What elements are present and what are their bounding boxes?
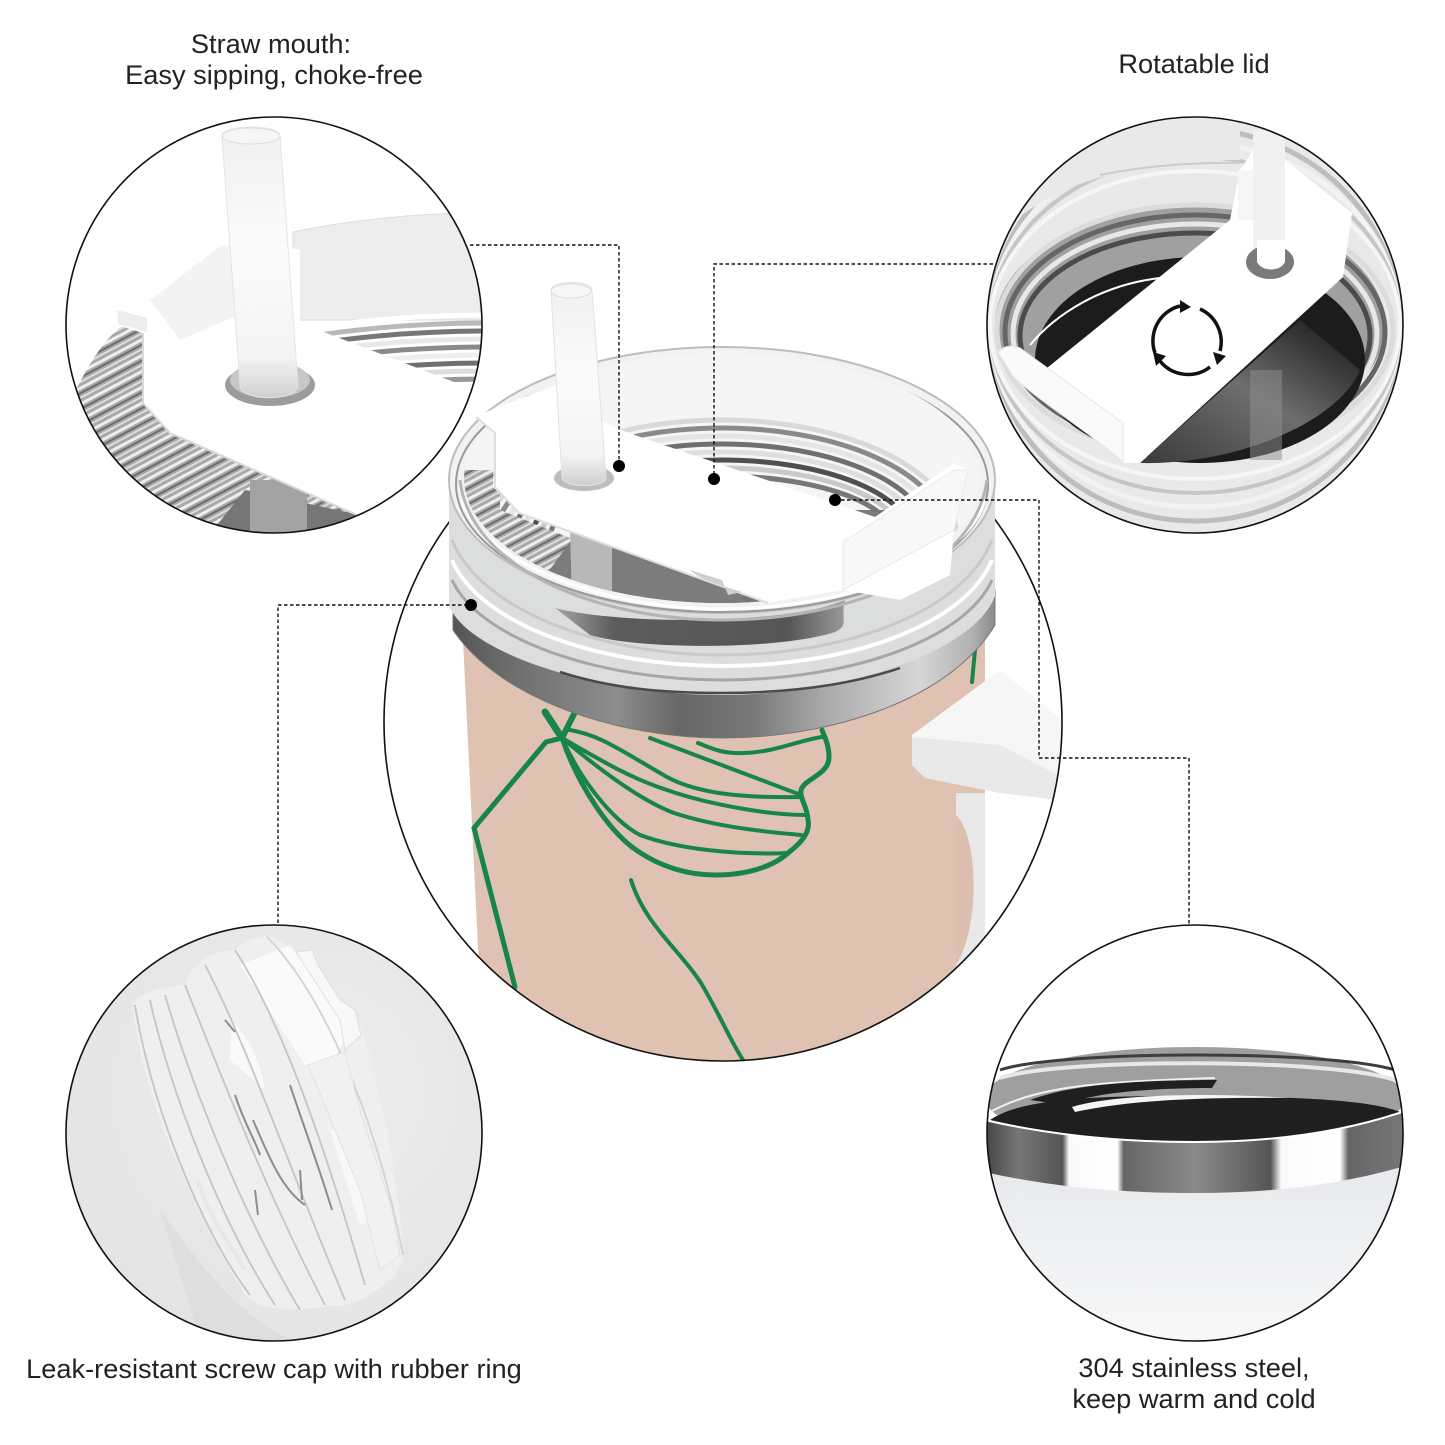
callout text: straw mouth: Straw mouth: <box>191 28 351 59</box>
lid front streaks <box>76 326 350 524</box>
lid skirt <box>449 480 995 695</box>
tumbler body <box>460 640 996 1070</box>
thread lines <box>135 937 403 1310</box>
white body <box>992 1168 1399 1334</box>
straw <box>551 282 614 491</box>
steel rim <box>989 1047 1401 1116</box>
dashed connector: straw mouth <box>470 245 619 465</box>
thread grooves <box>323 312 482 382</box>
clear lid <box>449 347 995 695</box>
callout text: stainless steel: keep warm and cold <box>1072 1383 1316 1414</box>
white tab <box>122 248 454 515</box>
callout text: leak-resistant cap: Leak-resistant screw cap with rubber ring <box>26 1353 522 1384</box>
white tab <box>1048 151 1352 463</box>
straw below tab <box>570 532 612 591</box>
straw <box>1253 134 1285 250</box>
straw <box>222 127 298 398</box>
rim slits <box>1030 1080 1217 1105</box>
cap nubs <box>296 950 361 1050</box>
bottom right circle: stainless steel detail <box>985 925 1405 1345</box>
front rim highlight <box>462 500 985 609</box>
bottom left circle: screw cap detail <box>66 925 482 1341</box>
leaf line art <box>474 650 975 1060</box>
top left circle: straw mouth detail <box>66 117 490 540</box>
straw hole <box>225 372 315 406</box>
cap body <box>134 991 402 1309</box>
center panel: tumbler close-up <box>384 282 1062 1070</box>
interior dark <box>990 1096 1400 1142</box>
callout text: stainless steel: 304 stainless steel, <box>1078 1352 1310 1383</box>
rim front stripes <box>990 129 1400 521</box>
callout text: straw mouth: Easy sipping, choke-free <box>125 59 423 90</box>
highlights <box>240 945 350 1065</box>
steel band <box>985 1112 1405 1193</box>
callout text: rotatable lid: Rotatable lid <box>1118 48 1270 79</box>
dark inner reflection <box>555 600 845 646</box>
dashed connector: stainless steel <box>835 500 1189 925</box>
dashed connector: rotatable lid <box>714 264 993 479</box>
lid front-left streaks <box>464 470 570 572</box>
cap shadow <box>161 1212 219 1286</box>
lid rim <box>449 347 995 613</box>
steel band <box>453 590 995 738</box>
center circle outline <box>383 518 1063 1062</box>
dashed connector: screw cap <box>278 605 470 923</box>
straw shadow <box>1250 370 1282 460</box>
thread grooves <box>995 208 1382 388</box>
icon: rotation arrows <box>1153 300 1226 374</box>
lid back wall <box>293 213 480 320</box>
slider tab <box>476 385 968 603</box>
top right circle: rotatable lid detail <box>987 117 1403 533</box>
handle <box>912 670 1062 800</box>
thread grooves <box>494 418 958 575</box>
connector dots <box>465 460 841 611</box>
